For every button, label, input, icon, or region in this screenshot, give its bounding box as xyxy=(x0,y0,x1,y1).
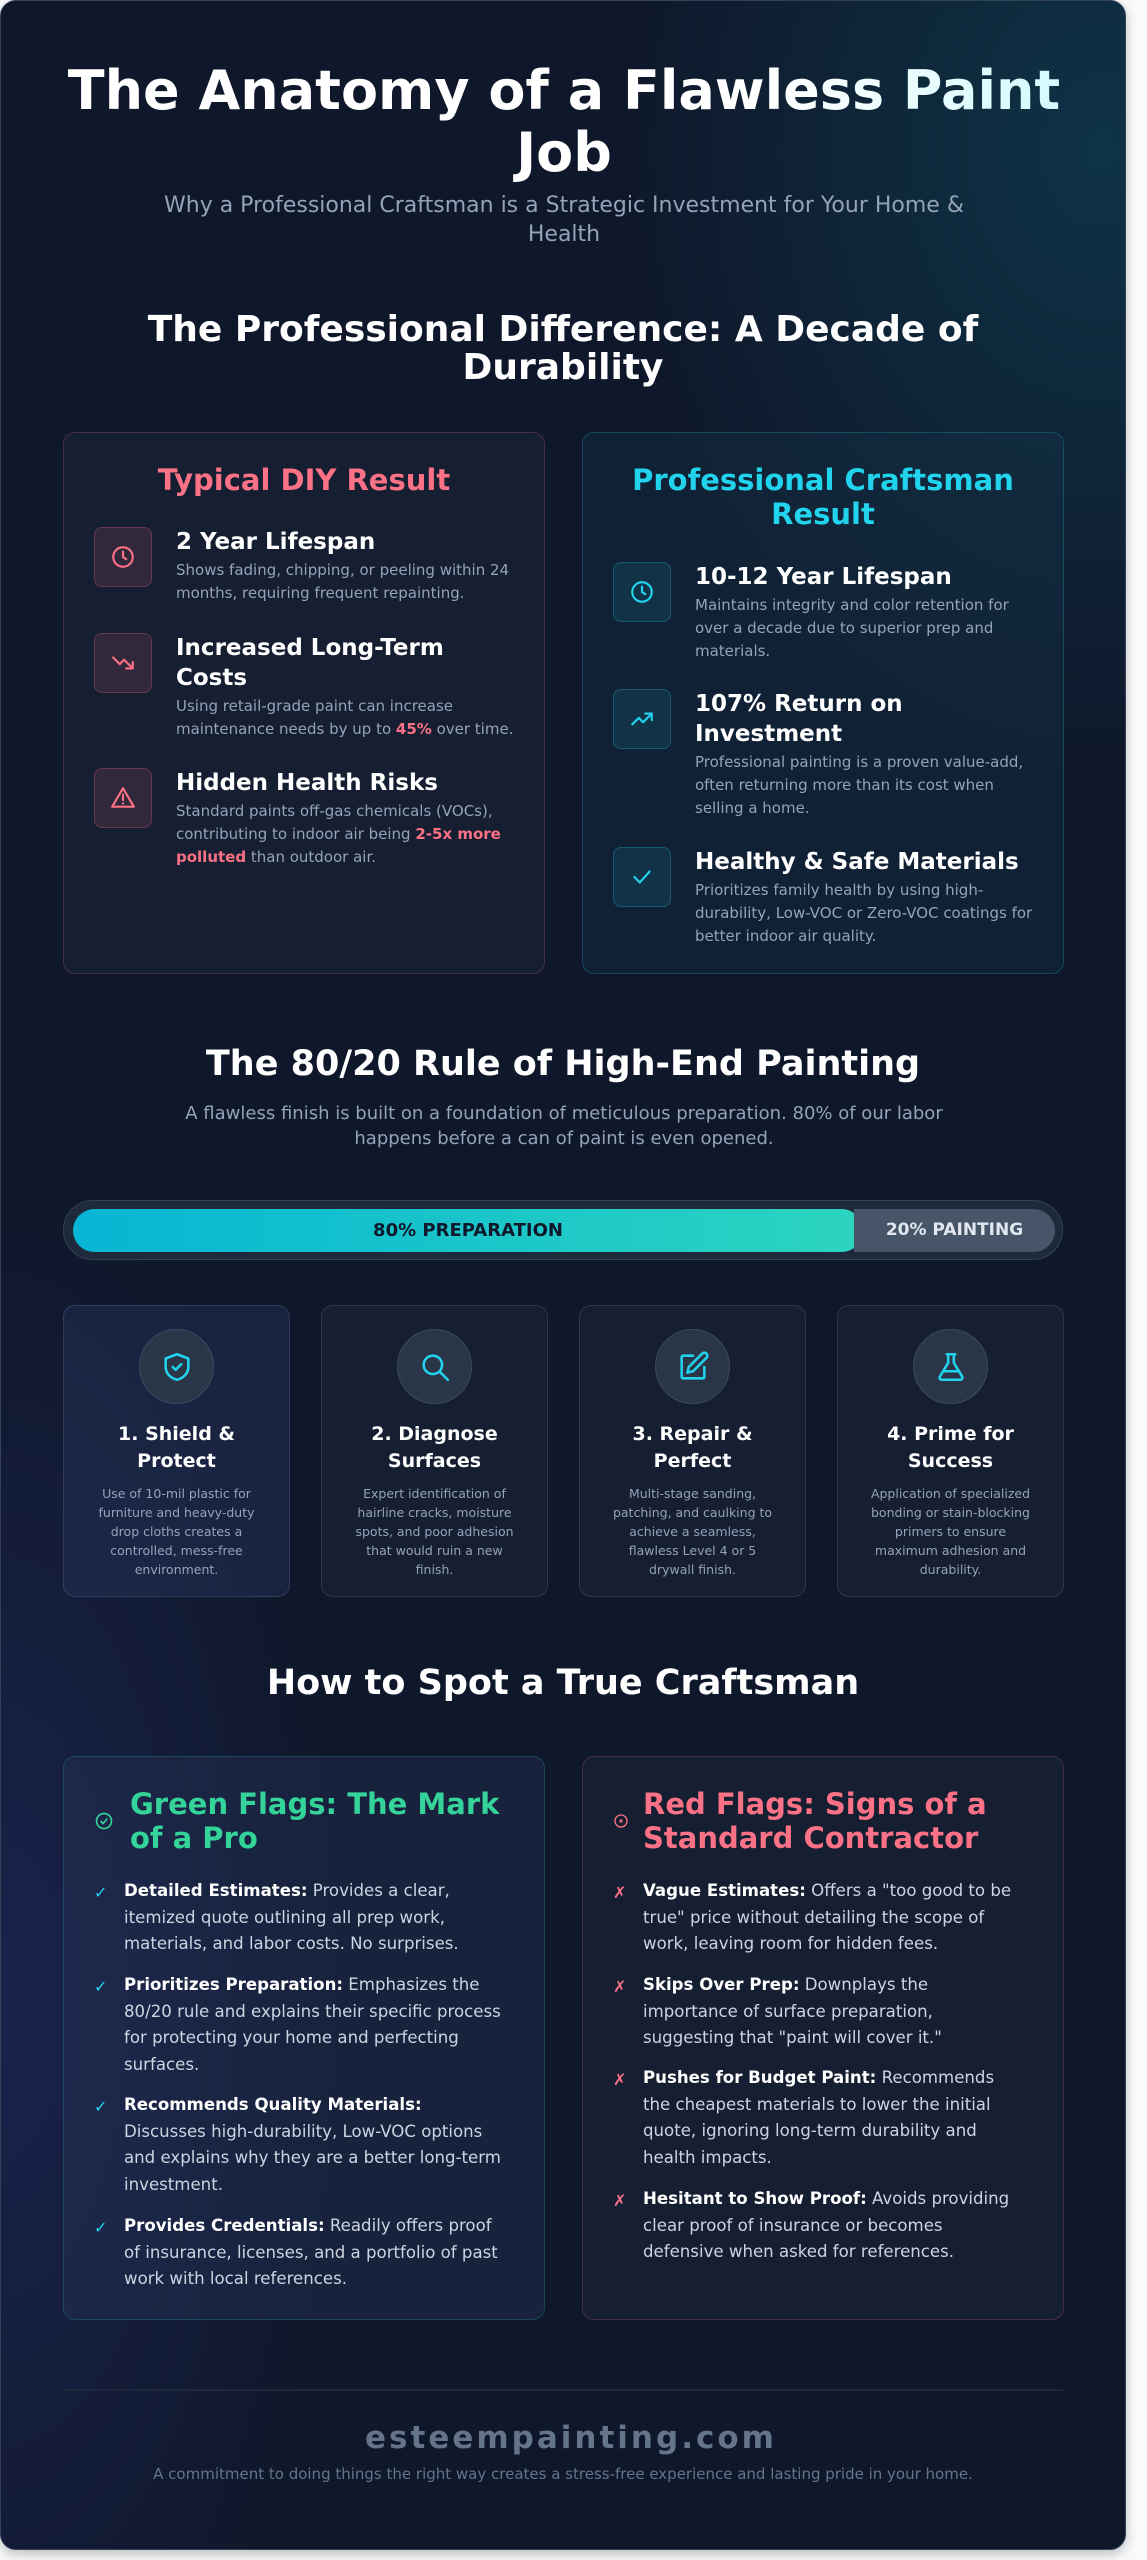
step 4: 4. Prime for xyxy=(887,1423,1014,1445)
icon: edit xyxy=(655,1329,730,1404)
icon: clock xyxy=(613,562,671,622)
green item 1: Detailed Estimates: Provides a clear, itemized quote outlining all prep work, materials, and labor costs. No surprises. xyxy=(124,1881,459,1953)
item: ROI xyxy=(613,689,1023,817)
icon: trending down xyxy=(94,633,152,693)
red item 2: Skips Over Prep: Downplays the importance of surface preparation, suggesting that "paint will cover it." xyxy=(643,1975,942,2047)
step 2: Surfaces xyxy=(388,1450,481,1472)
item: healthy materials: Healthy & Safe Materials xyxy=(695,849,1019,875)
icon: warning xyxy=(94,768,152,828)
footer: tagline: A commitment to doing things the right way creates a stress-free experience and lasting pride in your home. xyxy=(153,2465,973,2483)
item: ROI: 107% Return on Investment xyxy=(695,691,903,747)
step 2: 2. Diagnose xyxy=(371,1423,498,1445)
bar: preparation xyxy=(73,1209,863,1252)
step 1: Protect xyxy=(137,1450,216,1472)
green item 3: ✓ xyxy=(94,2097,107,2116)
green flags title: Green Flags: The Mark of a Pro xyxy=(130,1787,499,1855)
item: 2 year lifespan: Shows fading, chipping, or peeling within 24 months, requiring frequent repainting. xyxy=(176,561,509,602)
item: 2 year lifespan: 2 Year Lifespan xyxy=(176,529,375,555)
icon: clock xyxy=(94,527,152,587)
item: 2 year lifespan xyxy=(94,527,509,602)
item: healthy materials: Prioritizes family health by using high-durability, Low-VOC or Zero-VOC coatings for better indoor air quality. xyxy=(695,881,1032,945)
green item 1: ✓ xyxy=(94,1883,107,1902)
red item 3: Pushes for Budget Paint: Recommends the cheapest materials to lower the initial quote, ignoring long-term durability and health impacts. xyxy=(643,2068,994,2166)
step 4 xyxy=(837,1305,1064,1597)
bar: painting xyxy=(854,1209,1055,1252)
red item 4: ✗ xyxy=(613,2191,626,2210)
item: healthy materials xyxy=(613,847,1032,945)
step 3: Perfect xyxy=(654,1450,731,1472)
bar: painting: 20% PAINTING xyxy=(886,1220,1023,1240)
step 1: 1. Shield & xyxy=(118,1423,235,1445)
green item 2: ✓ xyxy=(94,1977,107,1996)
step 4: Success xyxy=(908,1450,993,1472)
green item 4: ✓ xyxy=(94,2218,107,2237)
80/20 subtitle: A flawless finish is built on a foundation of meticulous preparation. 80% of our labor happens before a can of paint is even opened. xyxy=(185,1103,943,1149)
red item 2: ✗ xyxy=(613,1977,626,1996)
item: health risks xyxy=(94,768,501,866)
panel: DIY result xyxy=(63,432,545,974)
icon: trending up xyxy=(613,689,671,749)
subtitle: Why a Professional Craftsman is a Strategic Investment for Your Home & Health xyxy=(164,193,964,247)
red item 1: ✗ xyxy=(613,1883,626,1902)
footer: website: esteempainting.com xyxy=(365,2420,777,2456)
bar chart: 80/20 xyxy=(63,1200,1063,1260)
bar: preparation: 80% PREPARATION xyxy=(373,1220,563,1241)
red item 4: Hesitant to Show Proof: Avoids providing clear proof of insurance or becomes defensive when asked for references. xyxy=(643,2189,1009,2261)
item: 10-12 year: Maintains integrity and color retention for over a decade due to superior prep and materials. xyxy=(695,596,1009,660)
green item 3: Recommends Quality Materials: Discusses high-durability, Low-VOC options and explains why they are a better long-term investment. xyxy=(124,2095,501,2194)
item: ROI: Professional painting is a proven value-add, often returning more than its cost when selling a home. xyxy=(695,753,1023,817)
step 3 xyxy=(579,1305,806,1597)
red item 3: ✗ xyxy=(613,2070,626,2089)
item: increased costs: Using retail-grade paint can increase maintenance needs by up to 45% over time. xyxy=(176,697,513,738)
heading: 80/20 rule: The 80/20 Rule of High-End Painting xyxy=(206,1044,920,1084)
DIY title: Typical DIY Result xyxy=(158,463,450,497)
green item 4: Provides Credentials: Readily offers proof of insurance, licenses, and a portfolio of past work with local references. xyxy=(124,2216,498,2288)
red flags title: Red Flags: Signs of a Standard Contractor xyxy=(643,1787,987,1855)
pro title: Professional Craftsman Result xyxy=(632,463,1014,531)
step 3: Multi-stage sanding, patching, and caulking to achieve a seamless, flawless Level 4 or 5 drywall finish. xyxy=(613,1486,772,1577)
icon: check circle xyxy=(96,1812,112,1830)
item: increased costs: Increased Long-Term Costs xyxy=(176,635,444,691)
icon: x circle xyxy=(614,1814,628,1828)
heading: professional difference: The Professional Difference: A Decade of Durability xyxy=(148,309,978,388)
panel: green flags xyxy=(63,1756,545,2320)
panel: professional result xyxy=(582,432,1064,974)
icon: check xyxy=(613,847,671,907)
step 3: 3. Repair & xyxy=(632,1423,753,1445)
item: 10-12 year: 10-12 Year Lifespan xyxy=(695,564,952,590)
heading: spot a craftsman: How to Spot a True Craftsman xyxy=(267,1663,859,1703)
item: increased costs xyxy=(94,633,513,738)
step 2: Expert identification of hairline cracks, moisture spots, and poor adhesion that would ruin a new finish. xyxy=(355,1486,514,1577)
title: The Anatomy of a Flawless Paint Job xyxy=(68,59,1060,184)
step 4: Application of specialized bonding or stain-blocking primers to ensure maximum adhesion and durability. xyxy=(871,1486,1030,1577)
green item 2: Prioritizes Preparation: Emphasizes the 80/20 rule and explains their specific process for protecting your home and perfecting surfaces. xyxy=(124,1975,501,2074)
step 1: Use of 10-mil plastic for furniture and heavy-duty drop cloths creates a controlled, mess-free environment. xyxy=(98,1486,254,1577)
icon: search xyxy=(397,1329,472,1404)
item: health risks: Standard paints off-gas chemicals (VOCs), contributing to indoor air being 2-5x more polluted than outdoor air. xyxy=(176,802,501,866)
step 1 xyxy=(63,1305,290,1597)
red item 1: Vague Estimates: Offers a "too good to be true" price without detailing the scope of work, leaving room for hidden fees. xyxy=(643,1881,1011,1953)
icon: shield xyxy=(139,1329,214,1404)
item: health risks: Hidden Health Risks xyxy=(176,770,438,796)
item: 10-12 year xyxy=(613,562,1009,660)
step 2 xyxy=(321,1305,548,1597)
panel: red flags xyxy=(582,1756,1064,2320)
icon: flask xyxy=(913,1329,988,1404)
